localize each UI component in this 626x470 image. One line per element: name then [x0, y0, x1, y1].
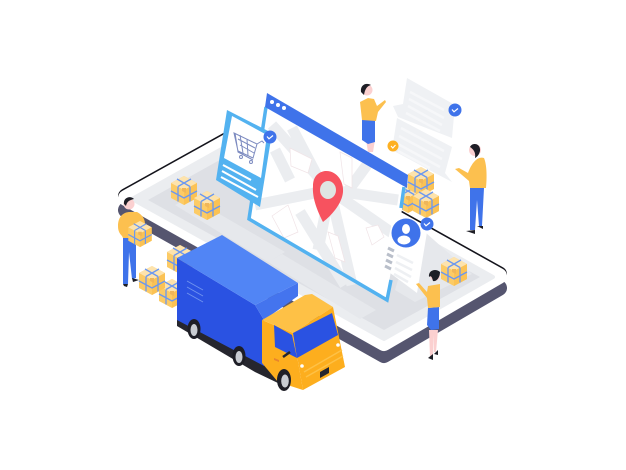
person: man looking at chat	[455, 144, 487, 234]
person: woman with document	[416, 270, 440, 360]
stacked boxes behind the map	[395, 167, 439, 218]
boxes on phone left	[171, 176, 220, 220]
icon: profile check badge	[420, 218, 434, 230]
person: man holding box	[118, 197, 152, 287]
icon: location pin	[313, 171, 343, 222]
truck cargo top	[177, 235, 298, 305]
truck cab	[262, 320, 303, 390]
chat bubble upper	[393, 78, 455, 138]
map roads	[255, 125, 398, 285]
profile document	[382, 218, 427, 293]
icon: orange check badge	[388, 140, 398, 152]
map frame	[249, 107, 404, 300]
boxes by the truck	[139, 245, 193, 308]
map sheet	[249, 107, 406, 299]
map window	[249, 93, 408, 300]
shopping cart card	[216, 110, 272, 207]
box on phone right	[441, 257, 467, 286]
truck chassis	[177, 318, 280, 384]
icon: cart check badge	[264, 130, 276, 144]
map header bar	[265, 93, 408, 188]
chat bubble lower	[392, 118, 452, 182]
truck cargo side	[177, 258, 264, 366]
person: woman presenting	[360, 84, 386, 152]
icon: chat check badge	[448, 104, 462, 116]
icon: cart	[234, 133, 264, 164]
phone base	[126, 131, 499, 355]
delivery truck	[177, 235, 345, 391]
truck wheels	[188, 319, 291, 391]
